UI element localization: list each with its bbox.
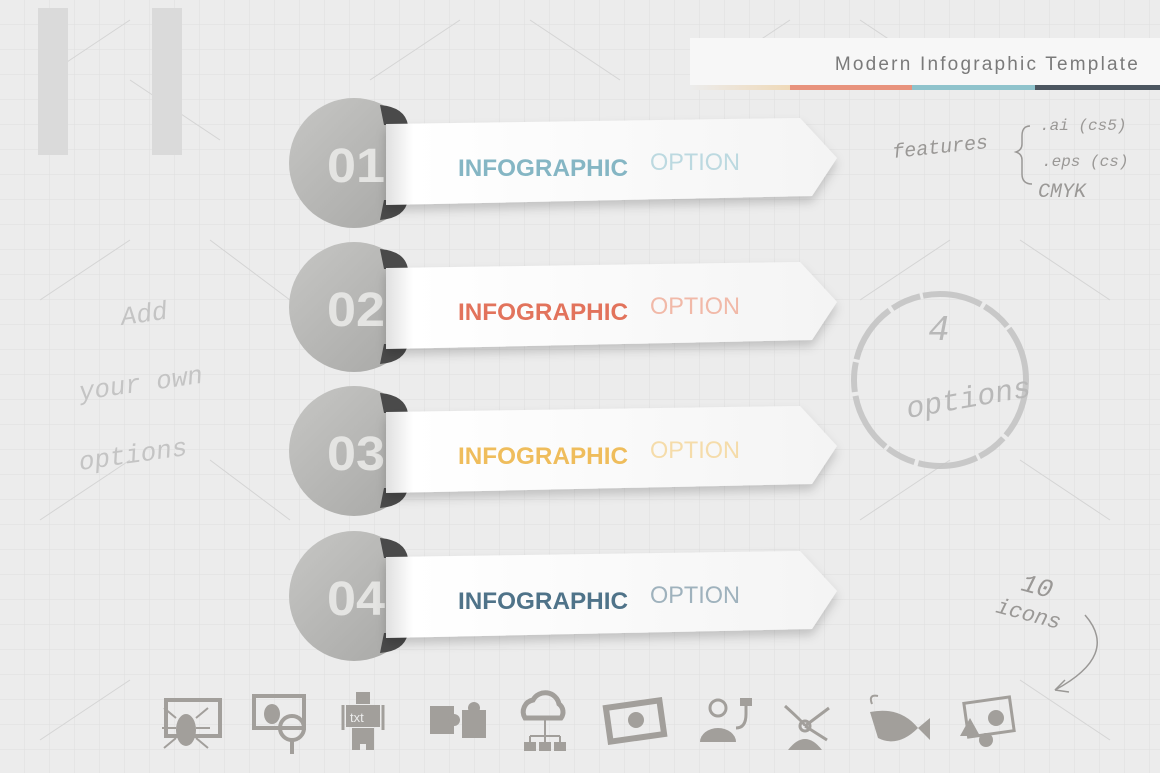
icon: warning screens <box>960 697 1014 747</box>
option 01: OPTION <box>650 149 740 176</box>
4 options circle note: 4 <box>928 310 950 351</box>
option 04: 04 <box>327 573 385 626</box>
option 03 <box>289 386 837 516</box>
icon: film <box>606 700 664 742</box>
10 icons note with arrow: 10 <box>1018 569 1056 606</box>
handwritten features note <box>891 117 1128 204</box>
icon: spider on screen <box>162 700 220 748</box>
option 01: INFOGRAPHIC <box>458 155 628 182</box>
option 01: 01 <box>327 140 385 193</box>
handwritten add your own options: Add <box>117 297 170 333</box>
handwritten features note: features <box>891 132 989 165</box>
option 02: OPTION <box>650 293 740 320</box>
title banner: Modern Infographic Template <box>835 54 1140 75</box>
option 04: OPTION <box>650 582 740 609</box>
4 options circle note: options <box>904 372 1034 428</box>
icon row <box>162 692 1014 754</box>
icon: monitor with magnifier <box>254 696 304 754</box>
option 01 <box>289 98 837 228</box>
handwritten add your own options: your own <box>76 361 205 408</box>
option 03: INFOGRAPHIC <box>458 443 628 470</box>
handwritten features note: CMYK <box>1038 181 1087 204</box>
icon: user with plug <box>700 698 752 742</box>
icon: txt robot: txt <box>350 710 364 725</box>
icon: txt robot <box>343 692 383 750</box>
option 04 <box>289 531 837 661</box>
icon: fish <box>870 696 930 741</box>
option 02: INFOGRAPHIC <box>458 299 628 326</box>
title banner <box>690 38 1160 90</box>
decorative bars top-left <box>38 8 182 155</box>
icon: cloud network <box>523 693 566 751</box>
option 03: OPTION <box>650 437 740 464</box>
option 02: 02 <box>327 284 385 337</box>
4 options circle note <box>854 294 1034 466</box>
handwritten add your own options <box>76 297 205 478</box>
handwritten features note: .ai (cs5) <box>1040 117 1126 135</box>
10 icons note with arrow <box>993 569 1097 692</box>
icon: puzzle <box>430 702 486 738</box>
handwritten add your own options: options <box>77 433 189 478</box>
option 03: 03 <box>327 428 385 481</box>
option 02 <box>289 242 837 372</box>
handwritten features note: .eps (cs) <box>1042 153 1128 171</box>
option 04: INFOGRAPHIC <box>458 588 628 615</box>
10 icons note with arrow: icons <box>993 595 1063 636</box>
icon: split arrows <box>785 706 829 750</box>
